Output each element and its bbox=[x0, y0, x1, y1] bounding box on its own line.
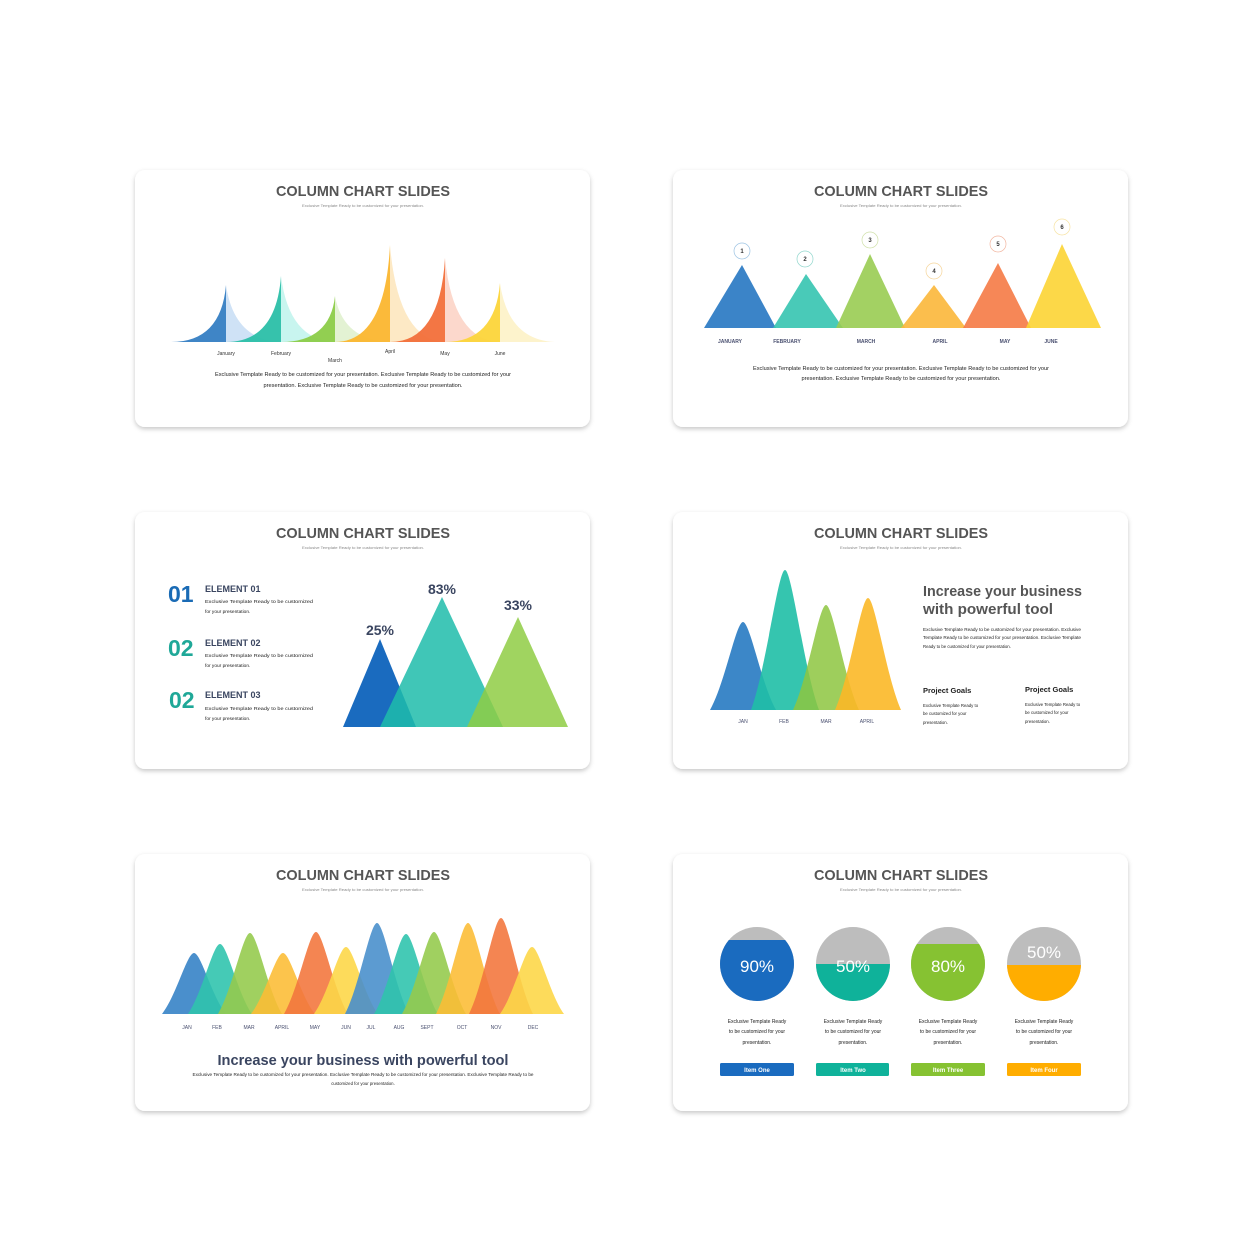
month labels: June bbox=[495, 351, 506, 357]
circle: 80% bbox=[911, 927, 985, 1001]
number markers: 4 bbox=[932, 269, 936, 275]
month labels: March bbox=[328, 358, 342, 364]
descriptions: Exclusive Template Ready bbox=[824, 1019, 883, 1025]
description: Ready to be customized for your presentation. bbox=[923, 644, 1011, 649]
element list: Exclusive Template Ready to be customized bbox=[205, 706, 313, 712]
title: COLUMN CHART SLIDES bbox=[276, 525, 450, 542]
bell chart bbox=[710, 570, 901, 725]
element list: ELEMENT 01 bbox=[205, 584, 261, 594]
title: COLUMN CHART SLIDES bbox=[276, 183, 450, 200]
month labels: JANUARY bbox=[718, 339, 743, 345]
bell chart: APRIL bbox=[860, 719, 874, 725]
element list: ELEMENT 02 bbox=[205, 638, 261, 648]
description bbox=[215, 372, 511, 389]
circle: 50%: 50% bbox=[836, 957, 870, 976]
title: COLUMN CHART SLIDES bbox=[814, 525, 988, 542]
descriptions: to be customized for your bbox=[920, 1029, 976, 1035]
heading: with powerful tool bbox=[922, 601, 1053, 618]
element list: Exclusive Template Ready to be customized bbox=[205, 653, 313, 659]
project goals: Exclusive Template Ready to bbox=[923, 703, 979, 708]
sail chart bbox=[171, 245, 555, 342]
description: Template Ready to be customized for your presentation. Exclusive Template bbox=[923, 635, 1082, 640]
element list: for your presentation. bbox=[205, 609, 250, 615]
project goals: be customized for your bbox=[923, 711, 967, 716]
month labels: JAN bbox=[182, 1025, 192, 1031]
item buttons: Item Two bbox=[840, 1068, 866, 1074]
title: COLUMN CHART SLIDES bbox=[814, 183, 988, 200]
project goals: be customized for your bbox=[1025, 710, 1069, 715]
subtitle: Exclusive Template Ready to be customized for your presentation. bbox=[840, 888, 962, 892]
number markers: 5 bbox=[996, 242, 1000, 248]
triangle chart bbox=[343, 581, 568, 727]
subtitle: Exclusive Template Ready to be customized for your presentation. bbox=[302, 546, 424, 550]
element list: ELEMENT 03 bbox=[205, 690, 261, 700]
descriptions: Exclusive Template Ready bbox=[728, 1019, 787, 1025]
month labels: FEBRUARY bbox=[773, 339, 801, 345]
descriptions bbox=[728, 1019, 1074, 1046]
circle: 90%: 90% bbox=[740, 957, 774, 976]
descriptions: Exclusive Template Ready bbox=[1015, 1019, 1074, 1025]
heading bbox=[922, 583, 1082, 618]
description bbox=[753, 366, 1049, 382]
subtitle: Exclusive Template Ready to be customized for your presentation. bbox=[840, 204, 962, 208]
heading: Increase your business with powerful tool bbox=[218, 1052, 508, 1069]
element list: 02 bbox=[168, 635, 194, 661]
month labels: SEPT bbox=[420, 1025, 434, 1031]
description: presentation. Exclusive Template Ready to be customized for your presentation. bbox=[264, 383, 462, 389]
project goals: Project Goals bbox=[1025, 685, 1073, 694]
project goals: Project Goals bbox=[923, 686, 971, 695]
bell chart: FEB bbox=[779, 719, 790, 725]
month labels: May bbox=[440, 351, 450, 357]
description: Exclusive Template Ready to be customized for your presentation. Exclusive Template Ready to be customized for your bbox=[753, 366, 1049, 372]
month labels: JUNE bbox=[1044, 339, 1058, 345]
number markers: 6 bbox=[1060, 225, 1064, 231]
project goals: presentation. bbox=[1025, 719, 1050, 724]
description: customized for your presentation. bbox=[331, 1081, 395, 1086]
item buttons bbox=[720, 1063, 1081, 1076]
description: presentation. Exclusive Template Ready to be customized for your presentation. bbox=[802, 376, 1000, 382]
element list: for your presentation. bbox=[205, 716, 250, 722]
month labels: MARCH bbox=[857, 339, 876, 345]
month labels: APRIL bbox=[275, 1025, 289, 1031]
circle: 50% top bbox=[1007, 927, 1081, 1001]
circle: 50% bbox=[816, 927, 890, 1001]
month labels: MAY bbox=[1000, 339, 1011, 345]
description bbox=[923, 627, 1082, 649]
description bbox=[192, 1072, 534, 1086]
month labels: OCT bbox=[457, 1025, 467, 1031]
panel: bell curve business slide bbox=[673, 512, 1128, 769]
title: COLUMN CHART SLIDES bbox=[276, 867, 450, 884]
heading: Increase your business bbox=[923, 583, 1082, 600]
month labels: FEB bbox=[212, 1025, 223, 1031]
item buttons: Item One bbox=[744, 1068, 770, 1074]
number markers bbox=[734, 219, 1070, 279]
month labels: MAY bbox=[310, 1025, 321, 1031]
month labels: NOV bbox=[491, 1025, 502, 1031]
panel: element list slide bbox=[135, 512, 590, 769]
bell chart: MAR bbox=[820, 719, 832, 725]
number markers: 1 bbox=[740, 249, 744, 255]
triangle chart: 25% bbox=[366, 622, 395, 638]
descriptions: to be customized for your bbox=[1016, 1029, 1072, 1035]
month labels bbox=[718, 339, 1058, 345]
circle: 50% top: 50% bbox=[1027, 943, 1061, 962]
element list: 02 bbox=[169, 687, 195, 713]
panel: sail chart slide bbox=[135, 170, 590, 427]
description: Exclusive Template Ready to be customized for your presentation. Exclusive Template Ready to be customized for your presentation. Exclusive Template Ready to be bbox=[192, 1072, 534, 1077]
item buttons: Item Four bbox=[1030, 1068, 1058, 1074]
element list: 01 bbox=[168, 581, 194, 607]
triangle chart bbox=[704, 244, 1101, 328]
triangle chart: 33% bbox=[504, 597, 533, 613]
project goals: Exclusive Template Ready to bbox=[1025, 702, 1081, 707]
descriptions: presentation. bbox=[934, 1040, 962, 1046]
descriptions: to be customized for your bbox=[825, 1029, 881, 1035]
number markers: 2 bbox=[803, 257, 807, 263]
subtitle: Exclusive Template Ready to be customized for your presentation. bbox=[302, 204, 424, 208]
triangle chart: 83% bbox=[428, 581, 457, 597]
month labels: February bbox=[271, 351, 291, 357]
element list: for your presentation. bbox=[205, 663, 250, 669]
number markers: 3 bbox=[868, 238, 872, 244]
descriptions: presentation. bbox=[839, 1040, 867, 1046]
title: COLUMN CHART SLIDES bbox=[814, 867, 988, 884]
element list bbox=[168, 581, 313, 722]
subtitle: Exclusive Template Ready to be customized for your presentation. bbox=[840, 546, 962, 550]
panel: percentage circles slide bbox=[673, 854, 1128, 1111]
element list: Exclusive Template Ready to be customized bbox=[205, 599, 313, 605]
month labels: April bbox=[385, 349, 395, 355]
month labels: MAR bbox=[243, 1025, 255, 1031]
descriptions: Exclusive Template Ready bbox=[919, 1019, 978, 1025]
bell chart bbox=[162, 918, 564, 1014]
subtitle: Exclusive Template Ready to be customized for your presentation. bbox=[302, 888, 424, 892]
month labels: DEC bbox=[528, 1025, 539, 1031]
panel: monthly bell chart slide bbox=[135, 854, 590, 1111]
month labels bbox=[182, 1025, 539, 1031]
descriptions: presentation. bbox=[743, 1040, 771, 1046]
descriptions: presentation. bbox=[1030, 1040, 1058, 1046]
circle: 80%: 80% bbox=[931, 957, 965, 976]
month labels: JUL bbox=[367, 1025, 376, 1031]
item buttons: Item Three bbox=[933, 1068, 964, 1074]
month labels: JUN bbox=[341, 1025, 351, 1031]
month labels: AUG bbox=[394, 1025, 405, 1031]
circle: 90% bbox=[720, 927, 794, 1001]
month labels bbox=[217, 349, 506, 364]
description: Exclusive Template Ready to be customized for your presentation. Exclusive bbox=[923, 627, 1082, 632]
month labels: January bbox=[217, 351, 235, 357]
descriptions: to be customized for your bbox=[729, 1029, 785, 1035]
bell chart: JAN bbox=[738, 719, 748, 725]
panel: numbered triangle slide bbox=[673, 170, 1128, 427]
description: Exclusive Template Ready to be customized for your presentation. Exclusive Template Ready to be customized for your bbox=[215, 372, 511, 378]
project goals bbox=[923, 685, 1081, 725]
month labels: APRIL bbox=[932, 339, 948, 345]
project goals: presentation. bbox=[923, 720, 948, 725]
